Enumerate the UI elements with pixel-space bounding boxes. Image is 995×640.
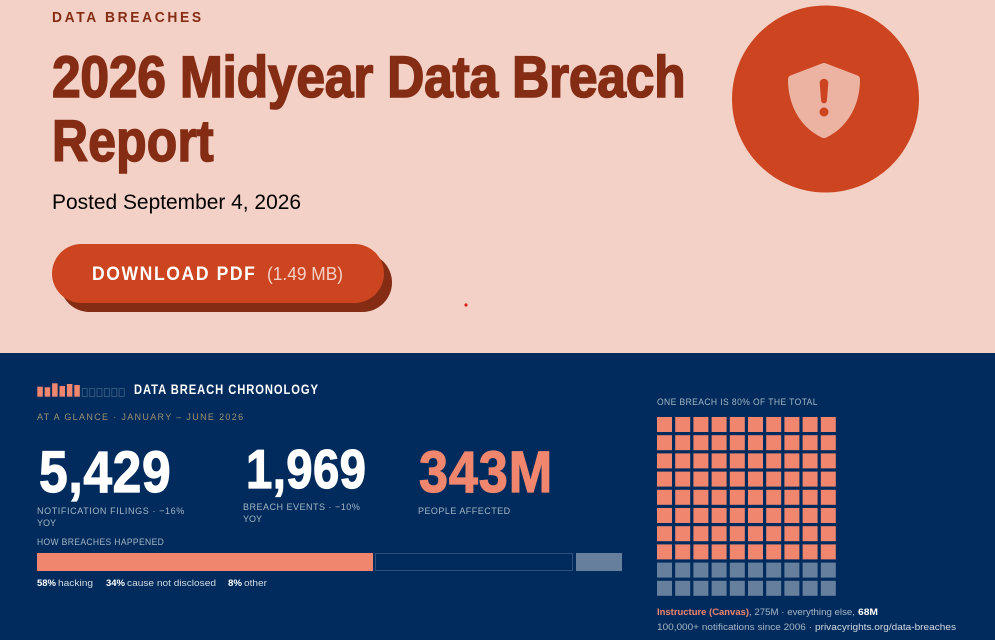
stat: breach events: BREACH EVENTS · −10% (243, 502, 360, 512)
title (52, 44, 686, 174)
stat: notification filings: 5,429 (39, 439, 171, 505)
caption: waffle values: , 275M · everything else, (749, 607, 855, 618)
caption: waffle values: 68M (858, 607, 878, 618)
icon: shield alert (732, 6, 919, 192)
legend: breach causes: 58% (37, 578, 56, 588)
download button: DOWNLOAD PDF (92, 262, 255, 284)
legend: breach causes: 8% (228, 578, 242, 588)
subheading: at a glance: AT A GLANCE · JANUARY – JUNE 2026 (37, 412, 243, 422)
caption: waffle values: Instructure (Canvas) (657, 607, 749, 618)
download button (52, 244, 392, 312)
source line (657, 622, 956, 633)
label: how breaches happened: HOW BREACHES HAPPENED (37, 537, 164, 547)
source line: 100,000+ notifications since 2006 · (657, 622, 812, 633)
panel: data breach chronology (0, 353, 995, 640)
stat: breach events: YOY (243, 514, 262, 524)
download button: (1.49 MB) (267, 263, 343, 284)
stat: people affected: PEOPLE AFFECTED (418, 506, 510, 516)
legend: breach causes: cause not disclosed (127, 578, 216, 588)
legend: breach causes (37, 578, 267, 588)
red dot (464, 303, 468, 307)
panel: report header (0, 0, 995, 353)
title: 2026 Midyear Data Breach (52, 44, 686, 110)
heading: data breach chronology: DATA BREACH CHRONOLOGY (134, 382, 318, 397)
eyebrow: data breaches: DATA BREACHES (52, 10, 201, 26)
logo: bar mark (37, 383, 124, 397)
label: one breach is 80%: ONE BREACH IS 80% OF THE TOTAL (657, 397, 818, 407)
stat: people affected: 343M (419, 439, 552, 505)
posted date: Posted September 4, 2026 (52, 191, 301, 214)
stat: notification filings (37, 439, 184, 528)
legend: breach causes: 34% (106, 578, 125, 588)
source line: privacyrights.org/data-breaches (815, 622, 956, 633)
stat: notification filings: YOY (37, 518, 56, 528)
stat: breach events: 1,969 (246, 439, 366, 500)
stat: notification filings: NOTIFICATION FILINGS · −16% (37, 506, 184, 516)
title: Report (52, 110, 214, 174)
legend: breach causes: hacking (58, 578, 93, 588)
stacked bar: breach causes (37, 553, 622, 571)
caption: waffle values (657, 607, 878, 618)
legend: breach causes: other (244, 578, 267, 588)
waffle chart: 100 squares, 80 highlighted (657, 417, 836, 596)
stat: breach events (243, 439, 366, 524)
